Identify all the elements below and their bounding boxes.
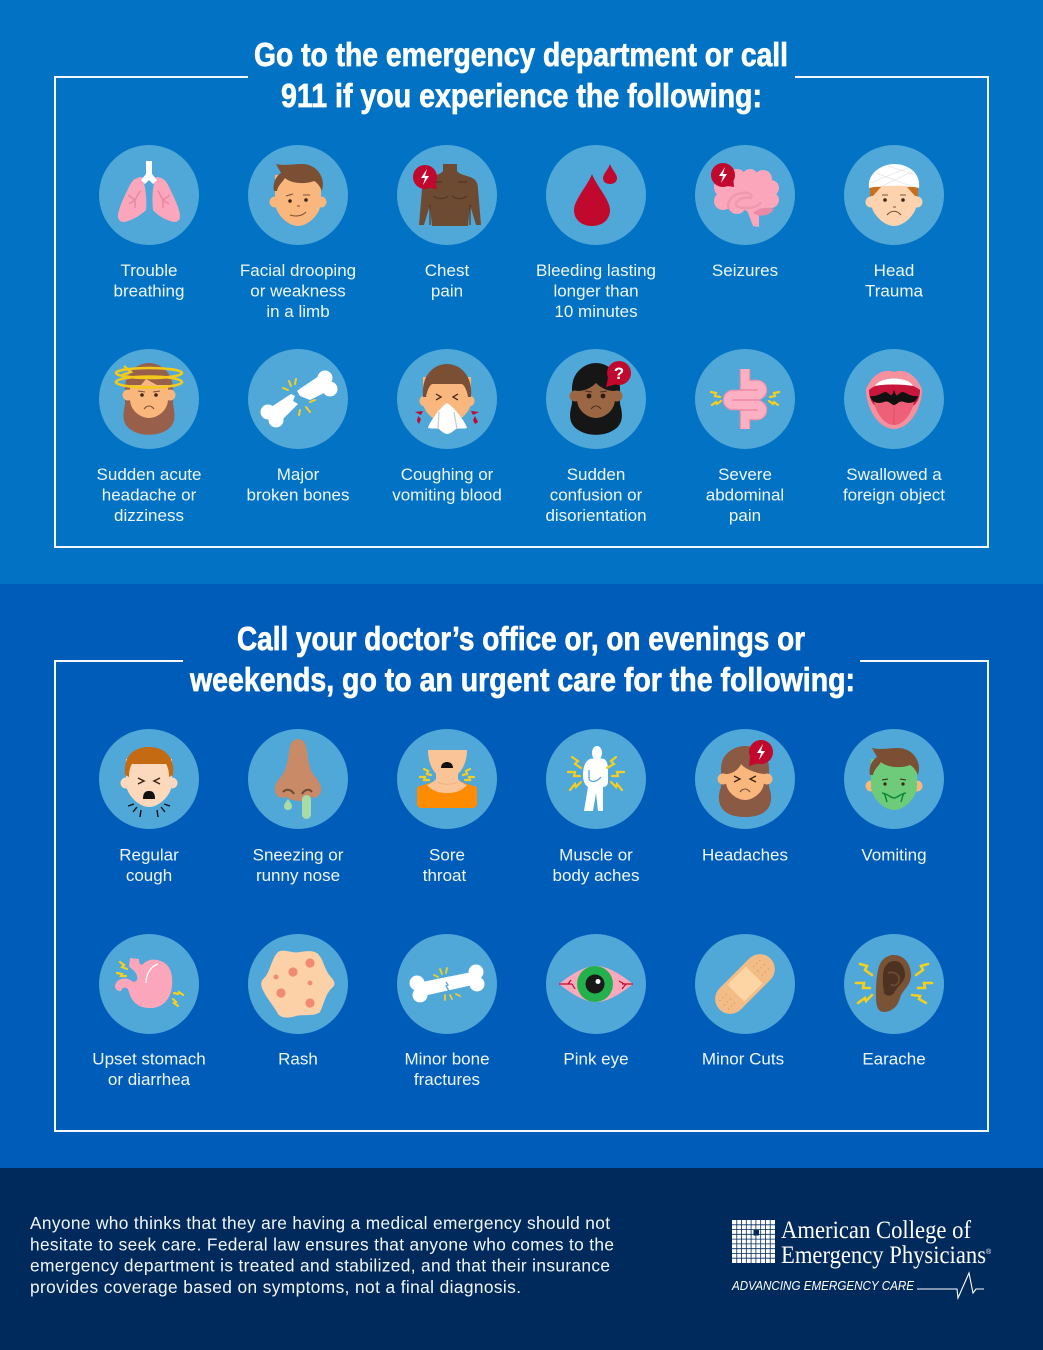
icon: adhesive bandage [695, 934, 795, 1034]
item: sudden headache [97, 349, 201, 525]
label: Pink eye [563, 1050, 629, 1068]
label: Swallowed a [846, 465, 942, 484]
item: bleeding [536, 145, 656, 321]
heartbeat line [917, 1273, 984, 1298]
icon: throat and shoulders [397, 729, 497, 829]
label: throat [423, 866, 467, 885]
label: dizziness [114, 506, 184, 525]
icon: green sick face [844, 729, 944, 829]
label: Headaches [702, 846, 788, 865]
icon: intestine [695, 349, 795, 449]
label: abdominal [706, 486, 784, 505]
logo: American College of Emergency Physicians [731, 1217, 992, 1298]
item: sore throat [397, 729, 497, 885]
icon: runny nose [248, 729, 348, 829]
item: head trauma [844, 145, 944, 300]
label: or weakness [250, 282, 346, 300]
label: Sneezing or [253, 846, 344, 865]
item: muscle or body aches [546, 729, 646, 885]
icon: confused woman [546, 349, 646, 449]
item: minor bone fractures [397, 934, 497, 1089]
label: or diarrhea [108, 1070, 191, 1089]
label: Seizures [712, 261, 778, 280]
panel: call your doctor or urgent care [0, 584, 1043, 1168]
icon: chest with pain badge [397, 145, 497, 245]
text: footer paragraph: provides coverage based on symptoms, not a final diagnosis. [30, 1277, 521, 1297]
label: Sudden acute [97, 465, 201, 484]
text: footer paragraph: hesitate to seek care. Federal law ensures that anyone who comes to the [30, 1234, 614, 1254]
item: pink eye [546, 934, 646, 1068]
label: Facial drooping [240, 261, 356, 280]
heading: emergency: Go to the emergency department or call [254, 36, 788, 73]
label: longer than [553, 282, 639, 300]
item: chest pain [397, 145, 497, 300]
heading: emergency: 911 if you experience the following: [281, 77, 762, 114]
label: Trouble [120, 261, 178, 280]
item: regular cough [99, 729, 199, 885]
label: in a limb [266, 302, 330, 321]
icon: dizzy woman [99, 349, 199, 449]
label: Sore [429, 846, 465, 865]
item: facial drooping [240, 145, 356, 321]
logo grid [732, 1220, 775, 1263]
label: headache or [102, 486, 197, 505]
label: 10 minutes [554, 302, 638, 321]
icon: brain with badge [695, 145, 795, 245]
label: Major [277, 465, 320, 484]
label: fractures [414, 1070, 480, 1089]
label: breathing [114, 282, 184, 300]
item: earache [844, 934, 944, 1068]
item: trouble breathing [99, 145, 199, 300]
icon: bandaged head [844, 145, 944, 245]
icon: woman with headache [695, 729, 795, 829]
text: footer paragraph: emergency department is treated and stabilized, and that their insurance [30, 1256, 610, 1276]
item: major broken bones [246, 349, 350, 505]
label: Bleeding lasting [536, 261, 656, 280]
item: severe abdominal pain [695, 349, 795, 525]
label: runny nose [256, 866, 340, 885]
label: Severe [718, 465, 772, 484]
label: Sudden [567, 465, 625, 484]
logo name: American College of [781, 1217, 972, 1244]
label: Head [874, 261, 914, 280]
text: footer paragraph: Anyone who thinks that they are having a medical emergency should not [30, 1213, 610, 1233]
heading: urgent care: weekends, go to an urgent care for the following: [189, 661, 855, 698]
item: sudden confusion [545, 349, 647, 525]
label: Coughing or [401, 465, 494, 484]
icon: confused woman: ? [614, 364, 624, 383]
panel: emergency department [0, 0, 1043, 584]
item: seizures [695, 145, 795, 280]
icon: body with aches [546, 729, 646, 829]
logo name: Emergency Physicians [781, 1242, 986, 1269]
label: broken bones [246, 486, 350, 505]
registered mark: ® [986, 1248, 992, 1256]
item: upset stomach [92, 934, 206, 1089]
label: disorientation [545, 506, 647, 525]
item: sneezing or runny nose [248, 729, 348, 885]
heading: urgent care: Call your doctor’s office or, on evenings or [237, 620, 805, 657]
icon: drooping face [248, 145, 348, 245]
icon: broken bone [248, 349, 348, 449]
panel: footer [0, 1168, 1043, 1350]
label: Minor Cuts [702, 1050, 784, 1068]
tagline: ADVANCING EMERGENCY CARE [731, 1278, 914, 1293]
label: Rash [278, 1050, 318, 1068]
label: Earache [862, 1050, 926, 1068]
label: pain [431, 282, 463, 300]
label: vomiting blood [392, 486, 502, 505]
item: headaches [695, 729, 795, 865]
label: pain [729, 506, 761, 525]
icon: open mouth [844, 349, 944, 449]
icon: stomach [99, 934, 199, 1034]
item: coughing blood [392, 349, 502, 505]
icon: coughing boy [99, 729, 199, 829]
label: Chest [425, 261, 469, 280]
icon: lungs [99, 145, 199, 245]
icon: blood drops [546, 145, 646, 245]
label: body aches [553, 866, 639, 885]
label: Muscle or [559, 846, 633, 865]
label: Minor bone [404, 1050, 490, 1068]
label: foreign object [843, 486, 945, 505]
icon: skin with rash [248, 934, 348, 1034]
label: Trauma [865, 282, 924, 300]
icon: coughing into tissue [397, 349, 497, 449]
label: Regular [119, 846, 179, 865]
item: vomiting [844, 729, 944, 865]
icon: fractured bone [397, 934, 497, 1034]
item: rash [248, 934, 348, 1068]
label: confusion or [550, 486, 643, 505]
item: swallowed foreign object [843, 349, 945, 505]
icon: red eye [546, 934, 646, 1034]
label: cough [126, 866, 172, 885]
label: Vomiting [861, 846, 927, 865]
item: minor cuts [695, 934, 795, 1068]
icon: ear [844, 934, 944, 1034]
label: Upset stomach [92, 1050, 206, 1068]
